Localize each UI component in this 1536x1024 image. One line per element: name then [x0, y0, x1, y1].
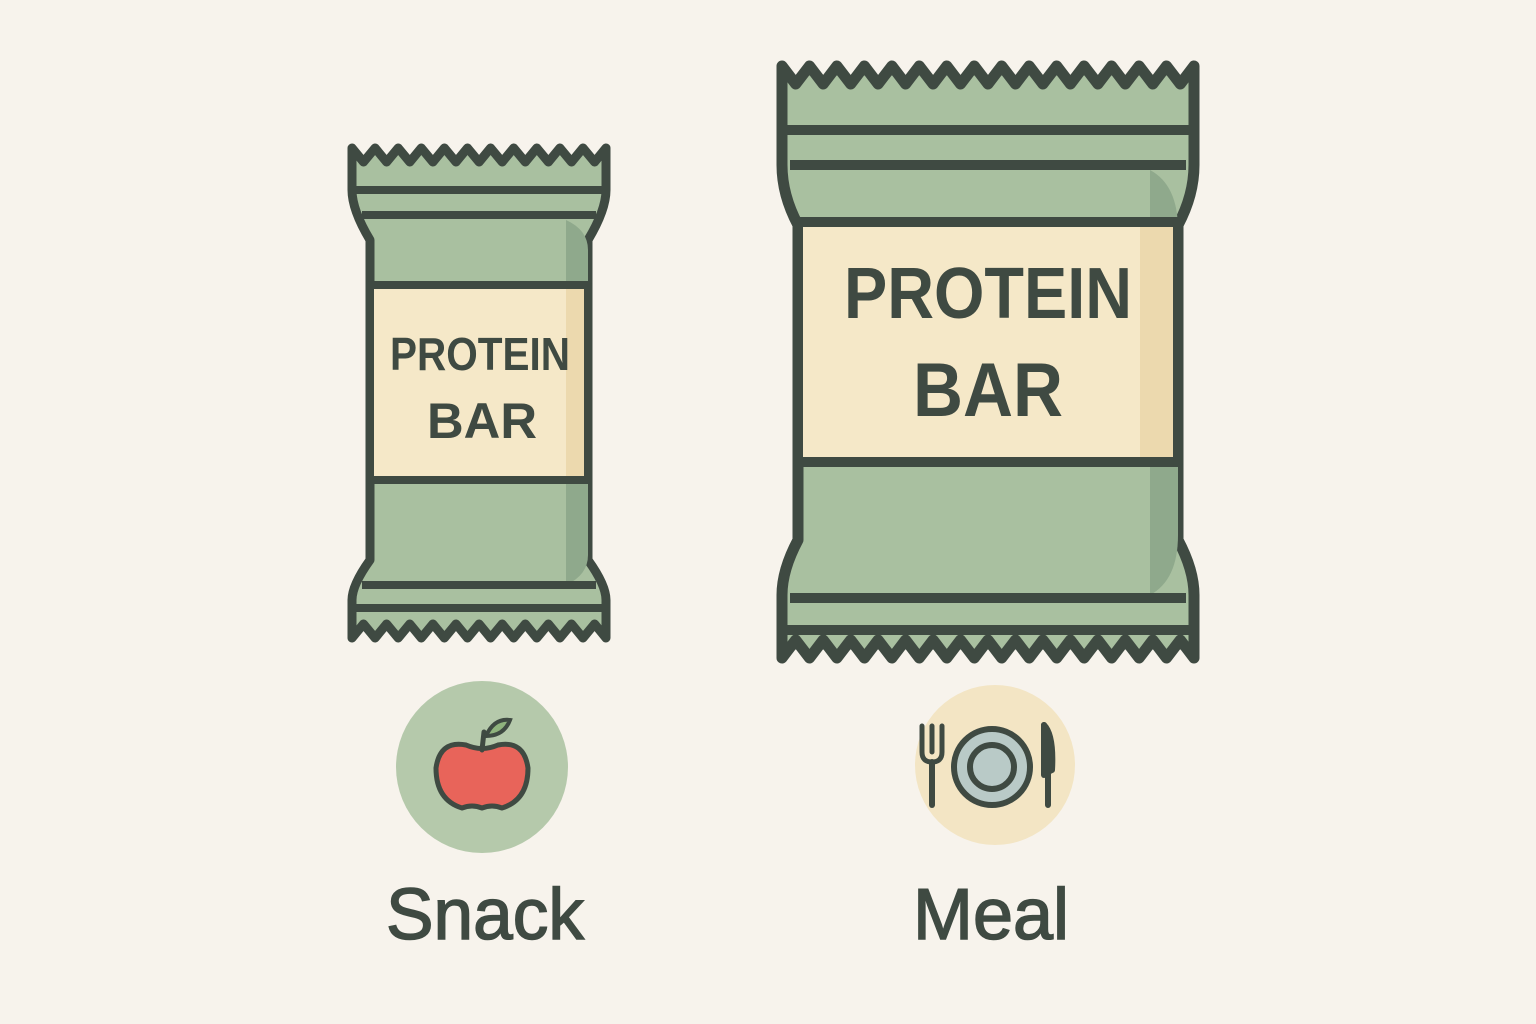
- large bar text: BAR: [913, 348, 1063, 433]
- large bar text: PROTEIN: [844, 254, 1132, 334]
- small protein bar (snack size): [352, 148, 606, 638]
- icon: plate with fork and knife: [915, 685, 1075, 845]
- small bar text: [390, 328, 570, 449]
- small bar text: PROTEIN: [390, 328, 570, 380]
- small bar text: BAR: [427, 393, 537, 449]
- label: Snack: Snack: [386, 875, 585, 955]
- icon: apple in green circle: [396, 681, 568, 853]
- large bar text: [844, 254, 1132, 433]
- label: Meal: Meal: [913, 875, 1069, 955]
- large protein bar (meal size): [782, 66, 1194, 658]
- large label panel: [798, 222, 1178, 462]
- small label panel: [370, 285, 588, 480]
